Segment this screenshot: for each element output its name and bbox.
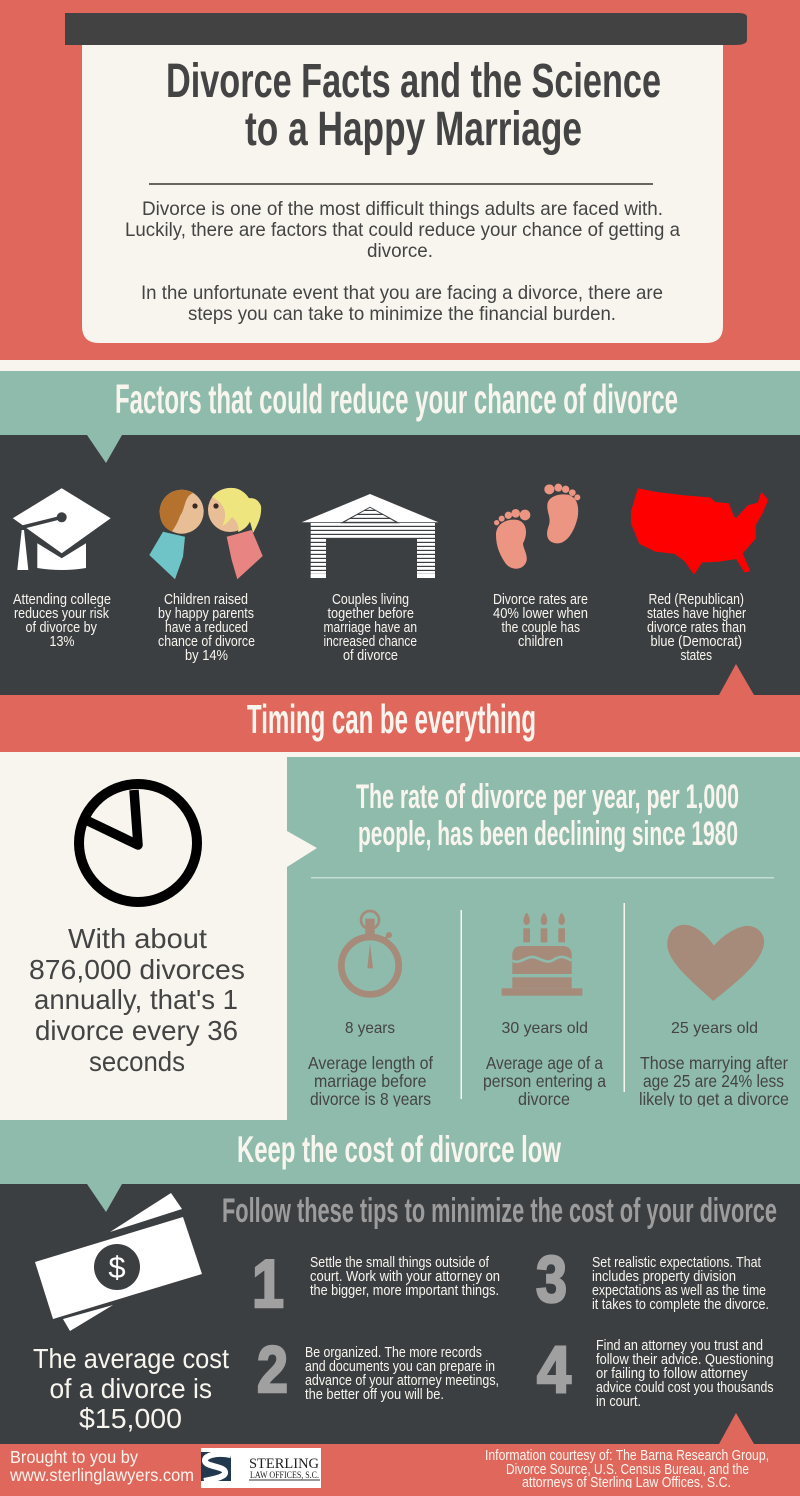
statistic text: 876,000 divorces	[29, 954, 245, 985]
tip 4: Find an attorney you trust and	[596, 1338, 763, 1354]
title	[166, 55, 661, 156]
tip 1: the bigger, more important things.	[310, 1283, 499, 1299]
statistic text	[29, 923, 245, 1077]
caption: children: Divorce rates are	[493, 592, 588, 608]
pointer: factors heading	[87, 435, 122, 463]
statistic text: divorce every 36	[35, 1015, 238, 1046]
caption: children: the couple has	[502, 620, 580, 636]
stat: 25 years old: Those marrying after	[640, 1053, 788, 1073]
panel: keep cost low	[0, 1120, 800, 1444]
stat: 8 years: divorce is 8 years	[310, 1089, 431, 1109]
heading: rate of divorce	[356, 778, 739, 853]
logo: Sterling Law Offices: LAW OFFICES, S.C.	[250, 1471, 319, 1481]
stat: 25 years old: 25 years old	[671, 1020, 758, 1037]
title: to a Happy Marriage	[245, 103, 582, 156]
tip 3	[536, 1242, 769, 1316]
pointer: footer	[719, 1413, 754, 1444]
logo: Sterling Law Offices	[201, 1448, 321, 1488]
statistic: average cost: $15,000	[79, 1403, 182, 1434]
caption: living together: of divorce	[343, 648, 398, 664]
tip 1	[252, 1246, 500, 1322]
paper card	[82, 45, 723, 343]
caption: happy parents: Children raised	[164, 592, 248, 608]
caption: red states: Red (Republican)	[648, 592, 744, 608]
statistic: average cost: of a divorce is	[50, 1373, 212, 1404]
statistic: average cost	[33, 1343, 229, 1434]
caption: college: Attending college	[13, 592, 111, 608]
tip 3: it takes to complete the divorce.	[592, 1297, 769, 1313]
caption: happy parents: chance of divorce	[158, 634, 255, 650]
tip 4: follow their advice. Questioning	[596, 1352, 774, 1368]
stat: 30 years old: divorce	[518, 1089, 570, 1109]
credit text	[9, 1447, 194, 1485]
intro text	[125, 198, 680, 325]
source text: attorneys of Sterling Law Offices, S.C.	[522, 1475, 731, 1491]
panel: footer	[0, 1413, 800, 1496]
stat: 30 years old: Average age of a	[486, 1053, 603, 1073]
statistic text: With about	[68, 923, 207, 954]
heading: keep cost low: Keep the cost of divorce low	[237, 1129, 561, 1170]
tip 4: advice could cost you thousands	[596, 1380, 774, 1396]
panel: header	[0, 0, 800, 360]
stat: 30 years old	[483, 1020, 606, 1109]
tip 1: Settle the small things outside of	[310, 1255, 490, 1271]
caption: red states	[647, 592, 746, 664]
caption: college	[13, 592, 111, 650]
caption: living together: Couples living	[332, 592, 409, 608]
tip 4	[537, 1332, 774, 1410]
caption: children: 40% lower when	[493, 606, 588, 622]
caption: living together: marriage have an	[324, 620, 417, 636]
caption: happy parents: have a reduced	[165, 620, 248, 636]
statistic: average cost: The average cost	[33, 1343, 229, 1374]
caption: red states: blue (Democrat)	[650, 634, 742, 650]
source text: Divorce Source, U.S. Census Bureau, and the	[506, 1462, 749, 1478]
logo: Sterling Law Offices: STERLING	[249, 1456, 319, 1472]
tip 1: 1	[252, 1246, 284, 1322]
caption: college: reduces your risk	[14, 606, 110, 622]
tip 2: advance of your attorney meetings,	[305, 1373, 499, 1389]
icon: dollar bills	[35, 1193, 202, 1331]
caption: red states: states have higher	[647, 606, 746, 622]
source text	[485, 1448, 769, 1491]
panel: divorces annually	[0, 752, 287, 1120]
tip 3: expectations as well as the time	[592, 1283, 766, 1299]
icon: red US map	[632, 489, 767, 573]
heading: timing: Timing can be everything	[247, 696, 536, 742]
panel: timing heading	[0, 664, 800, 752]
caption: red states: states	[680, 648, 712, 664]
caption: children: children	[518, 634, 563, 650]
icon: birthday cake	[502, 913, 582, 996]
caption: living together: increased chance	[324, 634, 417, 650]
icon: heart	[667, 925, 764, 1001]
intro text: divorce.	[367, 240, 433, 262]
dark top bar	[65, 13, 747, 45]
stat: 8 years: 8 years	[345, 1020, 395, 1037]
panel: declining rate	[287, 757, 800, 1120]
panel: factors	[0, 371, 800, 695]
caption: red states: divorce rates than	[647, 620, 746, 636]
credit text: Brought to you by	[10, 1447, 138, 1467]
pointer: cream arrow	[287, 831, 317, 867]
caption: happy parents: by 14%	[185, 648, 228, 664]
tip 1: court. Work with your attorney on	[310, 1269, 500, 1285]
stat: 8 years	[308, 1020, 433, 1109]
icon: clock	[79, 784, 197, 902]
tip 4: 4	[537, 1332, 571, 1406]
pointer: cost heading	[87, 1184, 122, 1212]
tip 3: Set realistic expectations. That	[592, 1255, 761, 1271]
icon: house	[302, 494, 438, 579]
credit text: www.sterlinglawyers.com	[9, 1465, 194, 1485]
statistic text: seconds	[89, 1046, 185, 1077]
tip 2: 2	[257, 1332, 288, 1406]
caption: college: of divorce by	[26, 620, 98, 636]
intro text: Divorce is one of the most difficult things adults are faced with.	[142, 198, 663, 220]
pointer: timing heading	[719, 664, 754, 695]
icon: graduation cap	[13, 488, 111, 570]
intro text: In the unfortunate event that you are facing a divorce, there are	[141, 282, 663, 304]
tip 3: 3	[536, 1242, 567, 1316]
icon: dollar bills: $	[108, 1250, 126, 1285]
tip 2: Be organized. The more records	[305, 1345, 482, 1361]
caption: college: 13%	[50, 634, 75, 650]
stat: 8 years: Average length of	[308, 1053, 433, 1073]
icon: baby feet	[494, 484, 580, 569]
tip 4: or failing to follow attorney	[596, 1366, 748, 1382]
intro text: Luckily, there are factors that could reduce your chance of getting a	[125, 219, 680, 241]
tip 2	[257, 1332, 499, 1406]
icon: stopwatch	[341, 911, 399, 994]
caption: living together: together before	[328, 606, 414, 622]
tip 3: includes property division	[592, 1269, 736, 1285]
stat: 25 years old	[639, 1020, 789, 1109]
tip 2: the better off you will be.	[305, 1387, 444, 1403]
tip 4: in court.	[596, 1394, 641, 1410]
tip 2: and documents you can prepare in	[305, 1359, 495, 1375]
stat: 30 years old: 30 years old	[502, 1020, 588, 1037]
icon: kissing children	[149, 488, 263, 579]
intro text: steps you can take to minimize the financial burden.	[188, 303, 616, 325]
caption: living together	[324, 592, 417, 664]
caption: happy parents: by happy parents	[158, 606, 254, 622]
caption: happy parents	[158, 592, 255, 664]
stat: 25 years old: age 25 are 24% less	[643, 1071, 784, 1091]
statistic text: annually, that's 1	[34, 984, 238, 1015]
stat: 8 years: marriage before	[314, 1071, 426, 1091]
stat: 30 years old: person entering a	[483, 1071, 606, 1091]
stat: 25 years old: likely to get a divorce	[639, 1089, 789, 1109]
caption: children	[493, 592, 588, 650]
